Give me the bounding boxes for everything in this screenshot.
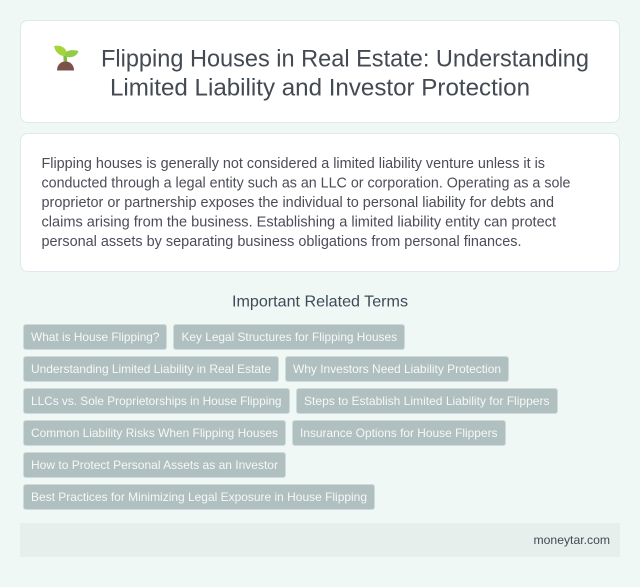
tag: [24, 356, 278, 382]
footer source: moneytar.com: [534, 533, 610, 547]
tag: [24, 484, 374, 510]
panel: description: [20, 134, 620, 272]
title: Flipping Houses in Real Estate: Understanding: [101, 46, 589, 72]
footer bar: [20, 523, 620, 557]
tag list: [24, 324, 558, 510]
tag: [24, 324, 166, 350]
tag: Understanding Limited Liability in Real Estate: [31, 362, 271, 376]
description text: personal assets by separating business obligations from personal finances.: [42, 233, 522, 250]
tag: How to Protect Personal Assets as an Investor: [31, 458, 278, 472]
tag: Key Legal Structures for Flipping Houses: [182, 330, 397, 344]
tag: [24, 420, 286, 446]
panel: title card: [20, 20, 620, 122]
tag: [292, 420, 506, 446]
tag: [286, 356, 508, 382]
tag: Best Practices for Minimizing Legal Exposure in House Flipping: [31, 490, 367, 504]
tag: Why Investors Need Liability Protection: [293, 362, 501, 376]
tag: LLCs vs. Sole Proprietorships in House Flipping: [31, 394, 282, 408]
heading: related terms: Important Related Terms: [232, 294, 408, 310]
description text: claims arising from the business. Establishing a limited liability entity can protect: [42, 214, 557, 230]
description text: [42, 155, 570, 250]
tag: [174, 324, 404, 350]
description text: proprietor or partnership exposes the individual to personal liability for debts and: [42, 194, 554, 211]
tag: Insurance Options for House Flippers: [300, 426, 498, 440]
tag: [24, 452, 286, 478]
tag: Common Liability Risks When Flipping Houses: [31, 426, 278, 440]
title: [101, 46, 589, 102]
title: Limited Liability and Investor Protection: [110, 74, 530, 102]
icon: seedling: [54, 46, 78, 70]
tag: [24, 388, 290, 414]
tag: What is House Flipping?: [31, 330, 160, 344]
tag: [296, 388, 558, 414]
description text: Flipping houses is generally not considered a limited liability venture unless it is: [42, 155, 545, 172]
description text: conducted through a legal entity such as an LLC or corporation. Operating as a sole: [42, 174, 570, 192]
tag: Steps to Establish Limited Liability for Flippers: [304, 394, 550, 408]
